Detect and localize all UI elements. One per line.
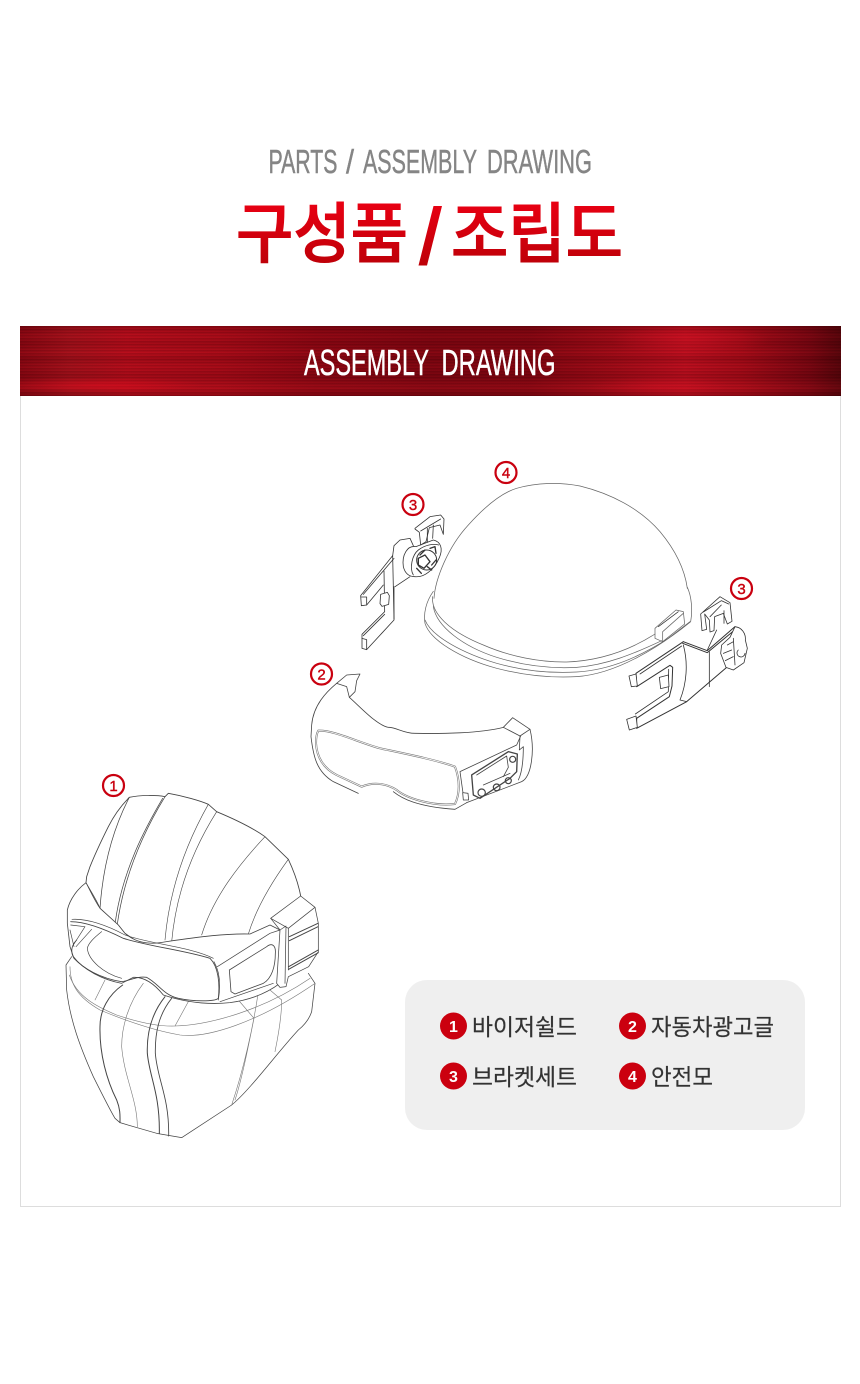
legend item 4: 4 bbox=[628, 1069, 637, 1086]
main heading bbox=[236, 197, 623, 271]
subtitle: parts / assembly drawing: ASSEMBLY bbox=[363, 143, 477, 180]
callout 4: 4 bbox=[502, 465, 510, 482]
part 2: auto-darkening goggle bbox=[311, 674, 532, 809]
goggle body bbox=[67, 883, 280, 1003]
banner: assembly drawing: ASSEMBLY bbox=[304, 342, 429, 383]
subtitle: parts / assembly drawing: DRAWING bbox=[487, 143, 592, 180]
callout 3 left bbox=[402, 494, 424, 515]
callout 3 left: 3 bbox=[409, 497, 417, 514]
callout 3 right bbox=[731, 578, 752, 599]
main heading: 구성품 bbox=[236, 197, 408, 271]
part 3: left bracket set bbox=[361, 515, 444, 650]
main heading: 조립도 bbox=[451, 197, 623, 271]
legend item 2: 2 bbox=[628, 1019, 637, 1036]
callout 3 right: 3 bbox=[737, 581, 746, 598]
lens double rim bbox=[316, 731, 459, 805]
banner: assembly drawing: DRAWING bbox=[442, 342, 556, 383]
part 4: safety helmet bbox=[425, 483, 692, 677]
subtitle: parts / assembly drawing: / bbox=[346, 143, 355, 180]
banner: assembly drawing bbox=[20, 326, 841, 396]
upper shell bbox=[86, 793, 301, 943]
part 1: visor shield bbox=[66, 793, 318, 1138]
legend item 3: 브라켓세트 bbox=[472, 1064, 577, 1090]
callout 4 bbox=[496, 462, 516, 483]
subtitle: parts / assembly drawing: PARTS bbox=[268, 143, 338, 180]
legend item 1: 1 bbox=[449, 1019, 458, 1036]
legend item 1: 바이저쉴드 bbox=[472, 1014, 577, 1040]
callout 2 bbox=[311, 664, 332, 684]
part 3: right bracket set bbox=[627, 597, 747, 730]
subtitle: parts / assembly drawing bbox=[268, 143, 592, 180]
panel: assembly drawing frame bbox=[20, 396, 841, 1207]
legend item 3: 3 bbox=[449, 1069, 458, 1086]
callout 2: 2 bbox=[317, 666, 326, 684]
legend panel bbox=[405, 980, 805, 1130]
legend item 4 bbox=[619, 1062, 713, 1090]
side strap bbox=[271, 896, 318, 987]
lower mask bbox=[66, 957, 315, 1138]
legend item 4: 안전모 bbox=[651, 1064, 713, 1090]
legend item 2: 자동차광고글 bbox=[651, 1014, 774, 1040]
callout 1 bbox=[103, 775, 124, 796]
callout 1: 1 bbox=[109, 778, 118, 795]
